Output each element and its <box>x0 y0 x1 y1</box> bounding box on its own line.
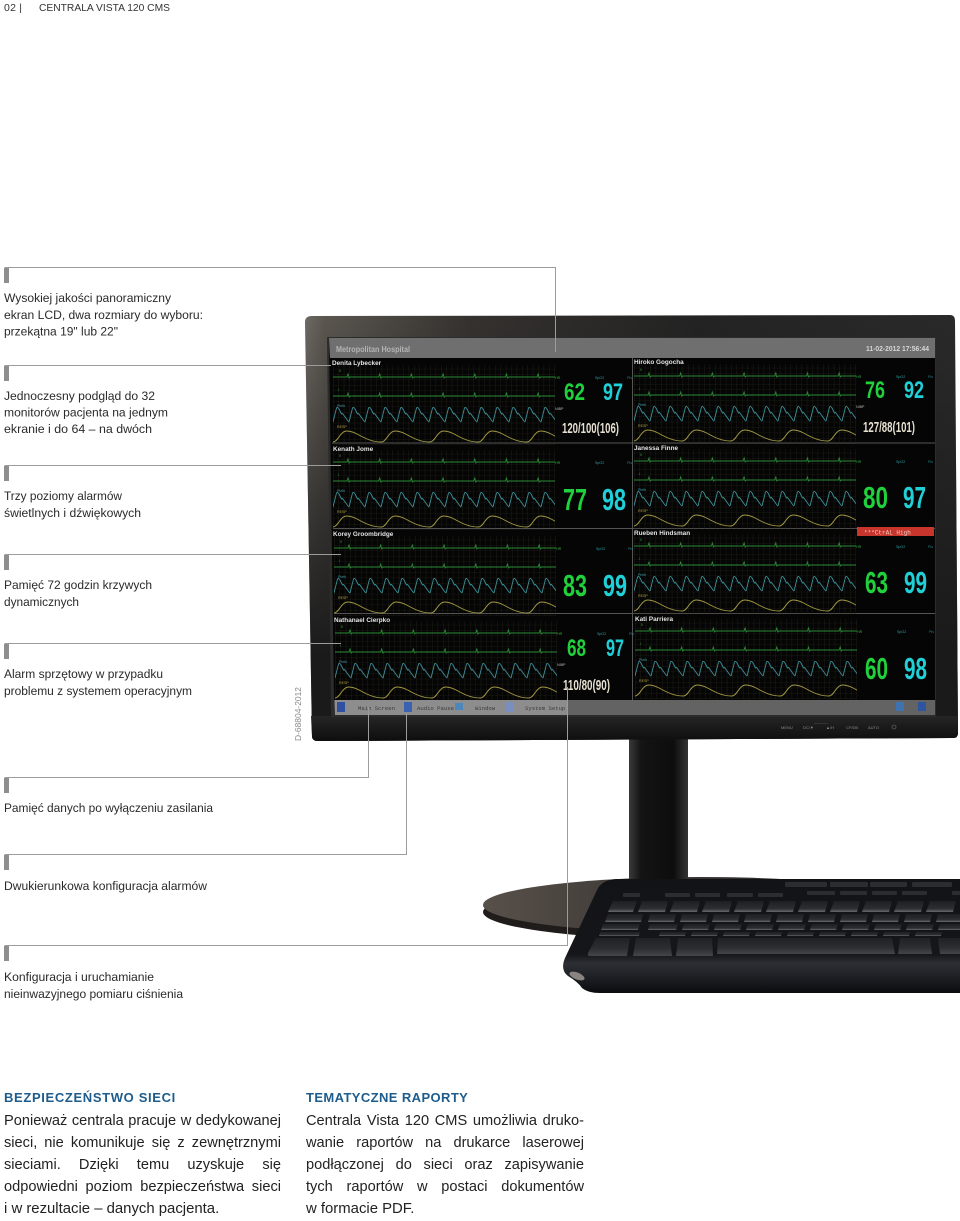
patient panel: Korey Groombridge: 99 <box>603 568 627 603</box>
screen <box>327 337 936 717</box>
rotated document code: D-68804-2012 <box>293 687 303 741</box>
callout 6: data memory: Pamięć danych po wyłączeniu zasilania <box>4 801 213 815</box>
patient panel: Nathanael Cierpko: Nathanael Cierpko <box>334 617 390 624</box>
patient panel: Kenath Jome: Kenath Jome <box>333 446 374 453</box>
patient panel: Janessa Finne: Janessa Finne <box>634 445 678 452</box>
patient panel: Kenath Jome <box>333 446 632 530</box>
patient panel: Hiroko Gogocha: NIBP <box>856 405 865 409</box>
text block: thematic reports: tych raportów w postaci dokumentów <box>306 1179 584 1195</box>
monitor front buttons: DC/▼ <box>803 725 814 730</box>
patient panel: Korey Groombridge: 83 <box>563 568 587 603</box>
patient panel: Kati Parriera: 60 <box>865 651 888 686</box>
callout 1: LCD screen: ekran LCD, dwa rozmiary do wyboru: <box>4 308 203 322</box>
patient panel: Nathanael Cierpko: NIBP <box>557 663 566 667</box>
heading: thematic reports: TEMATYCZNE RAPORTY <box>306 1090 468 1105</box>
row and column dividers <box>332 358 935 700</box>
text block: thematic reports: w formacie PDF. <box>306 1201 414 1217</box>
monitor front buttons: MENU <box>781 725 793 730</box>
patient panel: Hiroko Gogocha: 76 <box>865 377 885 404</box>
text block: network security: Ponieważ centrala pracuje w dedykowanej <box>4 1113 281 1129</box>
patient panel: Denita Lybecker: 120/100(106) <box>562 421 619 437</box>
callout 4: 72 hour memory <box>4 554 341 609</box>
monitor stand neck <box>629 735 688 882</box>
patient panel: Hiroko Gogocha: Hiroko Gogocha <box>634 359 684 366</box>
callout 7: two-way alarm configuration: Dwukierunkowa konfiguracja alarmów <box>4 879 207 893</box>
taskbar: System Setup <box>525 705 565 712</box>
patient panel: Kenath Jome: 98 <box>602 482 626 517</box>
callout 1: LCD screen <box>4 268 556 352</box>
monitor <box>305 315 958 741</box>
keyboard media keys <box>785 882 952 887</box>
patient panel: Hiroko Gogocha: 127/88(101) <box>863 420 915 436</box>
text block: thematic reports: wanie raportów na drukarce laserowej <box>306 1135 584 1151</box>
callout 5: hardware alarm: Alarm sprzętowy w przypadku <box>4 667 163 681</box>
callout 2: patient monitors: ekranie i do 64 – na dwóch <box>4 422 152 436</box>
callout 3: alarm levels <box>4 466 341 520</box>
text block: thematic reports: Centrala Vista 120 CMS umożliwia druko- <box>306 1113 584 1129</box>
callout 2: patient monitors: monitorów pacjenta na jednym <box>4 406 168 420</box>
callout 4: 72 hour memory: Pamięć 72 godzin krzywych <box>4 578 152 592</box>
taskbar: Main Screen <box>358 705 395 712</box>
monitor stand base <box>483 877 917 940</box>
callout 1: LCD screen: Wysokiej jakości panoramiczny <box>4 291 172 305</box>
patient panel: Denita Lybecker: 97 <box>603 379 623 406</box>
monitor front buttons: AUTO <box>868 725 879 730</box>
patient panel: Denita Lybecker: 62 <box>564 379 585 406</box>
keyboard function keys <box>623 891 960 897</box>
keyboard number row <box>608 901 956 912</box>
text block: network security: i w rezultacie – danych pacjenta. <box>4 1201 219 1217</box>
patient panel: Nathanael Cierpko <box>334 617 634 701</box>
monitor bezel <box>305 315 958 741</box>
taskbar: Audio Pause <box>417 705 454 712</box>
patient panel: Denita Lybecker: Denita Lybecker <box>332 360 382 367</box>
patient panel: Nathanael Cierpko: 97 <box>606 635 624 662</box>
alarm banner <box>857 527 934 536</box>
callout 7: two-way alarm configuration <box>4 713 406 893</box>
patient panel: Denita Lybecker: NIBP <box>555 407 564 411</box>
patient panel: Korey Groombridge: Korey Groombridge <box>333 531 394 538</box>
text block: network security <box>4 1090 281 1217</box>
monitor front buttons <box>781 723 896 730</box>
taskbar: Window <box>475 705 496 712</box>
keyboard shift row <box>599 932 942 936</box>
alarm banner: ***CtrAL High <box>864 530 911 536</box>
keyboard <box>563 879 960 993</box>
patient panel: Janessa Finne <box>634 445 933 529</box>
patient panel: Rueben Hindsman: 63 <box>865 565 888 600</box>
patient panel: Rueben Hindsman: 99 <box>904 565 927 600</box>
screen title bar: 11-02-2012 17:56:44 <box>866 344 930 353</box>
page header: 02 | <box>4 2 22 14</box>
patient panel: Rueben Hindsman: Rueben Hindsman <box>634 530 690 537</box>
patient panel: Hiroko Gogocha <box>634 359 933 444</box>
callout 3: alarm levels: Trzy poziomy alarmów <box>4 489 122 503</box>
screen title bar <box>329 338 935 358</box>
text block: network security: odpowiedni poziom bezpieczeństwa sieci <box>4 1179 281 1195</box>
heading: network security: BEZPIECZEŃSTWO SIECI <box>4 1090 176 1105</box>
patient panel: Janessa Finne: 97 <box>903 480 926 515</box>
patient panel: Kenath Jome: 77 <box>563 482 587 517</box>
monitor front buttons: CF/DB <box>846 725 858 730</box>
callout 8: NIBP configuration: nieinwazyjnego pomiaru ciśnienia <box>4 987 183 1001</box>
text block: thematic reports <box>306 1090 584 1217</box>
patient panel: Kati Parriera: Kati Parriera <box>635 616 673 623</box>
callout 2: patient monitors <box>4 366 331 436</box>
patient panel: Hiroko Gogocha: 92 <box>904 377 924 404</box>
text block: network security: sieciami. Dzięki temu uzyskuje się <box>4 1157 281 1173</box>
page header: CENTRALA VISTA 120 CMS <box>39 2 170 14</box>
keyboard QWERTY row <box>605 914 960 922</box>
taskbar <box>334 700 935 715</box>
patient panel: Denita Lybecker <box>332 360 632 445</box>
patient panel: Korey Groombridge <box>333 531 633 616</box>
callout 8: NIBP configuration: Konfiguracja i uruchamianie <box>4 970 154 984</box>
callout 8: NIBP configuration <box>4 687 568 1001</box>
patient panel: Rueben Hindsman <box>634 530 933 614</box>
callout 4: 72 hour memory: dynamicznych <box>4 595 79 609</box>
keyboard bottom row with space bar <box>588 938 960 956</box>
patient panel: Nathanael Cierpko: 110/80(90) <box>563 678 610 694</box>
keyboard home row <box>601 924 960 930</box>
patient panel: Kati Parriera: 98 <box>904 651 927 686</box>
patient panel: Janessa Finne: 80 <box>863 480 888 515</box>
patient panel: Nathanael Cierpko: 68 <box>567 635 586 662</box>
callout 6: data memory <box>4 707 368 815</box>
screen title bar: Metropolitan Hospital <box>336 345 410 354</box>
callout 3: alarm levels: świetlnych i dźwiękowych <box>4 506 141 520</box>
text block: thematic reports: podłączonej do sieci oraz zapisywanie <box>306 1157 584 1173</box>
callout 1: LCD screen: przekątna 19" lub 22" <box>4 324 118 338</box>
monitor front buttons: ▲/H <box>826 725 834 730</box>
patient panel: Kati Parriera <box>635 616 934 699</box>
callout 5: hardware alarm <box>4 644 341 698</box>
text block: network security: sieci, nie komunikuje się z zewnętrznymi <box>4 1135 281 1151</box>
callout 5: hardware alarm: problemu z systemem operacyjnym <box>4 684 192 698</box>
callout 2: patient monitors: Jednoczesny podgląd do 32 <box>4 389 155 403</box>
